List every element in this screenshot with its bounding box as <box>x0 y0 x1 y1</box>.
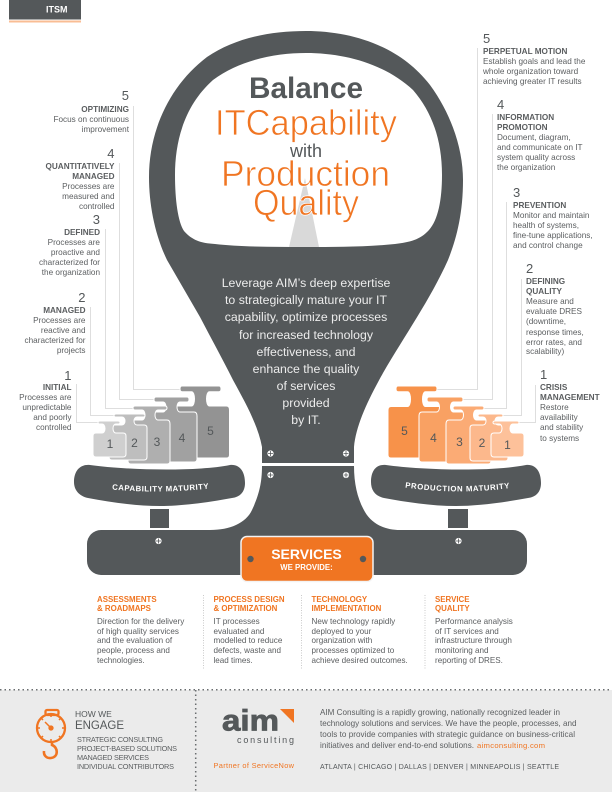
quality level 2: error rates, and <box>526 338 582 347</box>
quality level 1: availability <box>540 413 579 422</box>
title <box>215 72 397 223</box>
about text: AIM Consulting is a rapidly growing, nationally recognized leader in <box>320 708 560 717</box>
capability level 1: INITIAL <box>43 383 72 392</box>
service: assessments: of high quality services <box>97 627 179 636</box>
capability level 1: controlled <box>36 423 72 432</box>
intro text: for increased technology <box>239 328 374 342</box>
ITSM tab: ITSM <box>46 4 68 14</box>
service: quality: infrastructure through <box>435 636 512 645</box>
quality level 4: system quality across <box>497 153 575 162</box>
how we engage: ENGAGE <box>75 720 124 732</box>
service: process design: defects, waste and <box>214 646 281 655</box>
service: process design <box>214 595 285 665</box>
capability level 5: OPTIMIZING <box>81 105 129 114</box>
quality level 5: Establish goals and lead the <box>483 57 586 66</box>
partner line: Partner of ServiceNow <box>214 761 295 770</box>
production weight numbers: 3 <box>456 435 463 449</box>
capability level 4: 4 <box>107 146 114 161</box>
production weight numbers: 1 <box>504 438 511 452</box>
footer dotted rules <box>0 690 612 792</box>
how we engage: INDIVIDUAL CONTRIBUTORS <box>77 762 174 771</box>
quality level 2: 2 <box>526 261 533 276</box>
service: technology: TECHNOLOGY <box>312 595 368 604</box>
capability level 2: MANAGED <box>43 306 86 315</box>
service: technology: processes optimized to <box>312 646 395 655</box>
capability weight numbers: 5 <box>207 424 214 438</box>
intro text: by IT. <box>291 413 321 427</box>
capability maturity pan <box>74 464 245 506</box>
aim consulting logo <box>222 704 294 745</box>
footer background <box>0 690 612 792</box>
weight 1 <box>93 421 126 457</box>
capability level 5 <box>53 88 130 134</box>
quality level 1: to systems <box>540 434 579 443</box>
aim consulting logo: aim <box>222 704 279 738</box>
intro text: enhance the quality <box>253 362 360 376</box>
quality level 3: health of systems, <box>513 221 579 230</box>
about text: aimconsulting.com <box>477 741 545 750</box>
dial needle <box>289 178 319 247</box>
service: quality <box>435 595 513 665</box>
weight 4 <box>419 397 471 462</box>
quality level 4: INFORMATION <box>497 113 554 122</box>
rivets <box>155 450 462 544</box>
aim consulting logo: consulting <box>237 735 294 745</box>
intro text: Leverage AIM’s deep expertise <box>222 276 390 290</box>
service: assessments <box>97 595 185 665</box>
quality level 1: MANAGEMENT <box>540 393 600 402</box>
quality level 5: whole organization toward <box>482 67 579 76</box>
about text: tools to provide companies with strategic guidance on business-critical <box>320 730 575 739</box>
service: process design: IT processes <box>214 617 260 626</box>
about text: initiatives and deliver end-to-end solutions. <box>320 741 474 750</box>
quality level 4: Document, diagram, <box>497 133 571 142</box>
service: assessments: people, process and <box>97 646 170 655</box>
weight 3 <box>446 406 491 464</box>
capability level 5: 5 <box>122 88 129 103</box>
capability maturity pan: CAPABILITY MATURITY <box>112 483 208 492</box>
quality level 2: scalability) <box>526 347 564 356</box>
capability level 2: characterized for <box>25 336 86 345</box>
service: quality: monitoring and <box>435 646 489 655</box>
right pan post <box>448 509 468 528</box>
quality level 1: CRISIS <box>540 383 568 392</box>
weight 3 <box>128 406 170 464</box>
capability level 4: QUANTITATIVELY <box>46 162 115 171</box>
weight 2 <box>109 414 147 460</box>
quality level 3: fine-tune applications, <box>513 231 593 240</box>
capability weight numbers: 3 <box>154 435 161 449</box>
capability weight numbers: 1 <box>107 437 114 451</box>
quality level 3 <box>513 185 593 250</box>
service: technology: deployed to your <box>312 627 372 636</box>
quality level 2: Measure and <box>526 297 574 306</box>
intro text: provided <box>282 396 330 410</box>
capability level 3: the organization <box>42 268 100 277</box>
about text: technology solutions and services. We have the people, processes, and <box>320 719 576 728</box>
capability level 1: Processes are <box>19 393 72 402</box>
service: assessments: and the evaluation of <box>97 636 173 645</box>
intro text: effectiveness, and <box>257 345 356 359</box>
quality level 2: DEFINING <box>526 277 565 286</box>
capability level 5: improvement <box>82 125 130 134</box>
service: quality: SERVICE <box>435 595 470 604</box>
capability level 1: 1 <box>64 368 72 383</box>
leader lines right <box>437 48 536 422</box>
service: assessments: & ROADMAPS <box>97 604 151 613</box>
scale base column <box>210 466 400 530</box>
services badge <box>241 536 373 582</box>
quality level 3: Monitor and maintain <box>513 211 590 220</box>
quality level 5: achieving greater IT results <box>483 77 582 86</box>
service: technology: achieve desired outcomes. <box>312 656 408 665</box>
title: Quality <box>253 182 359 223</box>
balance scale body <box>87 31 527 575</box>
title: with <box>289 141 322 161</box>
service: process design: modelled to reduce <box>214 636 283 645</box>
service: assessments: ASSESSMENTS <box>97 595 157 604</box>
column dividers <box>204 595 425 669</box>
weight 1 <box>491 421 524 457</box>
ITSM tab <box>9 0 81 22</box>
service: assessments: Direction for the delivery <box>97 617 185 626</box>
service: technology <box>312 595 408 665</box>
service: process design: & OPTIMIZATION <box>214 604 278 613</box>
capability level 1: unpredictable <box>22 403 72 412</box>
how we engage: HOW WE <box>75 709 112 719</box>
service: quality: Performance analysis <box>435 617 513 626</box>
quality level 1: 1 <box>540 367 547 382</box>
title: Balance <box>249 72 363 105</box>
quality level 1: and stability <box>540 423 584 432</box>
quality level 5 <box>482 31 586 86</box>
quality level 4: PROMOTION <box>497 123 548 132</box>
intro text <box>222 276 390 427</box>
capability level 1: and poorly <box>33 413 72 422</box>
quality level 2 <box>526 261 584 356</box>
quality level 4: and communicate on IT <box>497 143 583 152</box>
quality level 4: 4 <box>497 97 504 112</box>
weight 4 <box>146 397 197 462</box>
intro text: capability, optimize processes <box>225 310 387 324</box>
service: process design: lead times. <box>214 656 253 665</box>
how we engage: STRATEGIC CONSULTING <box>77 735 163 744</box>
quality level 4: the organization <box>497 163 556 172</box>
capability level 3: DEFINED <box>64 228 100 237</box>
badge rivets <box>247 556 366 562</box>
production weight numbers: 5 <box>401 424 408 438</box>
base bar <box>87 530 527 575</box>
intro text: to strategically mature your IT <box>225 293 387 307</box>
intro text: of services <box>277 379 335 393</box>
services badge: SERVICES <box>271 546 342 562</box>
icon: hanging scale <box>37 710 65 758</box>
quality level 1 <box>540 367 600 443</box>
production maturity pan <box>371 464 541 506</box>
capability level 4: controlled <box>79 202 115 211</box>
quality level 2: (downtime, <box>526 317 566 326</box>
how we engage <box>75 709 177 771</box>
service: technology: New technology rapidly <box>312 617 396 626</box>
service: assessments: technologies. <box>97 656 145 665</box>
capability level 1 <box>19 368 72 432</box>
leader lines left <box>76 106 180 422</box>
quality level 4 <box>497 97 583 172</box>
capability weight numbers: 4 <box>179 431 186 445</box>
quality level 1: Restore <box>540 403 569 412</box>
how we engage: PROJECT-BASED SOLUTIONS <box>77 744 177 753</box>
capability level 2 <box>25 290 86 355</box>
capability level 4: Processes are <box>62 182 115 191</box>
capability level 3: characterized for <box>39 258 100 267</box>
weight 5 <box>388 386 445 458</box>
title: ITCapability <box>215 102 397 143</box>
about text <box>320 708 576 750</box>
capability level 4 <box>46 146 115 211</box>
service: technology: IMPLEMENTATION <box>312 604 382 613</box>
service: quality: reporting of DRES. <box>435 656 503 665</box>
quality level 3: 3 <box>513 185 520 200</box>
capability weights <box>93 386 230 464</box>
how we engage: MANAGED SERVICES <box>77 753 149 762</box>
service: quality: of IT services and <box>435 627 499 636</box>
production weights <box>388 386 524 464</box>
quality level 3: PREVENTION <box>513 201 566 210</box>
capability level 3: Processes are <box>48 238 100 247</box>
service: process design: PROCESS DESIGN <box>214 595 285 604</box>
capability weight numbers <box>107 424 214 451</box>
office cities: ATLANTA | CHICAGO | DALLAS | DENVER | MINNEAPOLIS | SEATTLE <box>320 764 559 771</box>
capability level 2: 2 <box>78 290 86 305</box>
capability level 3 <box>39 212 100 277</box>
service: quality: QUALITY <box>435 604 470 613</box>
scale head and column <box>149 31 463 463</box>
weight 2 <box>470 414 508 461</box>
capability level 3: proactive and <box>51 248 100 257</box>
quality level 5: 5 <box>483 31 490 46</box>
capability level 2: reactive and <box>41 326 86 335</box>
quality level 2: QUALITY <box>526 287 562 296</box>
quality level 3: and control change <box>513 241 583 250</box>
dial window <box>175 53 442 247</box>
capability level 2: projects <box>57 346 86 355</box>
left pan post <box>150 509 169 528</box>
capability level 4: measured and <box>62 192 115 201</box>
capability level 4: MANAGED <box>72 172 115 181</box>
services badge: WE PROVIDE: <box>280 563 333 572</box>
production weight numbers: 2 <box>479 436 486 450</box>
production weight numbers: 4 <box>430 431 437 445</box>
capability level 3: 3 <box>93 212 100 227</box>
quality level 5: PERPETUAL MOTION <box>483 47 568 56</box>
capability weight numbers: 2 <box>131 436 138 450</box>
production maturity pan: PRODUCTION MATURITY <box>406 482 509 492</box>
capability level 2: Processes are <box>33 316 86 325</box>
capability level 5: Focus on continuous <box>53 115 129 124</box>
weight 5 <box>172 386 230 458</box>
quality level 2: evaluate DRES <box>526 307 583 316</box>
service: process design: evaluated and <box>214 627 264 636</box>
quality level 2: response times, <box>526 328 584 337</box>
title: Production <box>221 153 390 194</box>
service: technology: organization with <box>312 636 372 645</box>
production weight numbers <box>401 424 511 452</box>
